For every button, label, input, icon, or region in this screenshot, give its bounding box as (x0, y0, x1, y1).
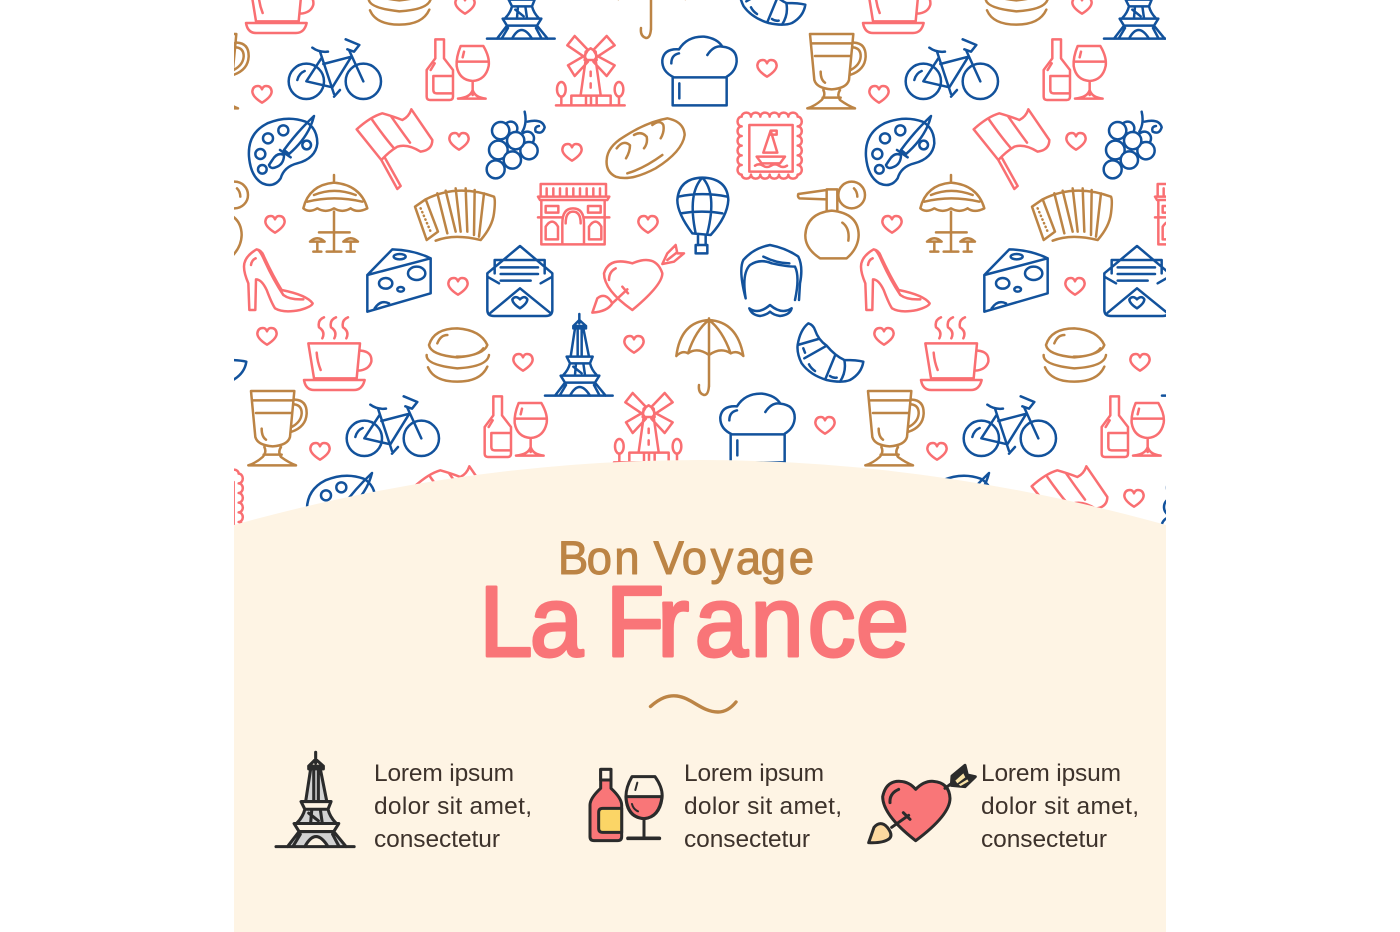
icon: coffee cup (304, 317, 371, 390)
text: feature 2: Lorem ipsum (684, 760, 824, 787)
pattern tile (244, 34, 866, 396)
icon: french flag (357, 109, 432, 189)
icon: heart with arrow colored (869, 765, 975, 843)
pattern repeat: same row left (0, 34, 249, 396)
icon: wine bottle and glass colored (590, 769, 662, 841)
icon: postage stamp (738, 113, 802, 179)
icon: eiffel tower dark (276, 752, 354, 847)
icon: cafe parasol table (303, 175, 367, 252)
icon: bicycle (289, 39, 381, 99)
icon: grapes (487, 112, 545, 178)
pattern repeat: upper row centre (186, 0, 808, 39)
title: La France: La France (479, 565, 909, 677)
icon: arc de triomphe (538, 184, 609, 244)
text: feature 3 (981, 760, 1139, 853)
text: feature 2: consectetur (684, 826, 810, 853)
divider: squiggle (650, 696, 736, 712)
text: feature 3: Lorem ipsum (981, 760, 1121, 787)
text: feature 3: dolor sit amet, (981, 793, 1139, 820)
icon: love letter (487, 246, 552, 316)
pattern repeat: lower row left (0, 391, 307, 753)
feature 2: wine with text (590, 760, 842, 853)
icon: high heel shoe (244, 249, 313, 311)
feature 1: eiffel tower with text (276, 752, 532, 853)
text: feature 1: Lorem ipsum (374, 760, 514, 787)
icon: baguette bread (607, 118, 685, 178)
icon: accordion (415, 188, 495, 241)
heading: Bon Voyage: Bon Voyage (558, 531, 814, 584)
icon: wine bottle and glass (427, 39, 489, 100)
icon: croissant (797, 323, 863, 382)
icon: windmill (556, 36, 625, 105)
icon: heart with arrow (592, 245, 684, 313)
icon: cheese wedge (367, 249, 431, 312)
feature 3: heart with text (869, 760, 1139, 853)
icons: small hearts (252, 60, 777, 371)
pattern repeat: upper row right (862, 0, 1166, 40)
background panel: white pattern card (234, 0, 1166, 932)
pattern repeat: lower row right (919, 391, 1400, 753)
pattern repeat: same row right (861, 34, 1400, 396)
text: feature 1: dolor sit amet, (374, 793, 532, 820)
icon: man with moustache (741, 245, 801, 316)
pattern repeat: lower row centre (302, 391, 924, 753)
icon: hot air balloon (677, 178, 728, 253)
text: feature 2: dolor sit amet, (684, 793, 842, 820)
icon: macaron (427, 328, 489, 382)
icon: perfume bottle (798, 182, 865, 258)
icon: eiffel tower (545, 314, 613, 396)
icon: umbrella (676, 318, 743, 395)
icon: chef hat (662, 37, 737, 105)
text: feature 3: consectetur (981, 826, 1107, 853)
text: feature 1: consectetur (374, 826, 500, 853)
panel: cream curved footer (234, 460, 1166, 932)
text: feature 1 (374, 760, 532, 853)
icon: palette and brush (249, 116, 317, 185)
pattern repeat: upper row left (0, 0, 191, 39)
icon pattern (234, 0, 1166, 846)
text: feature 2 (684, 760, 842, 853)
icon: irish coffee glass (807, 34, 866, 108)
